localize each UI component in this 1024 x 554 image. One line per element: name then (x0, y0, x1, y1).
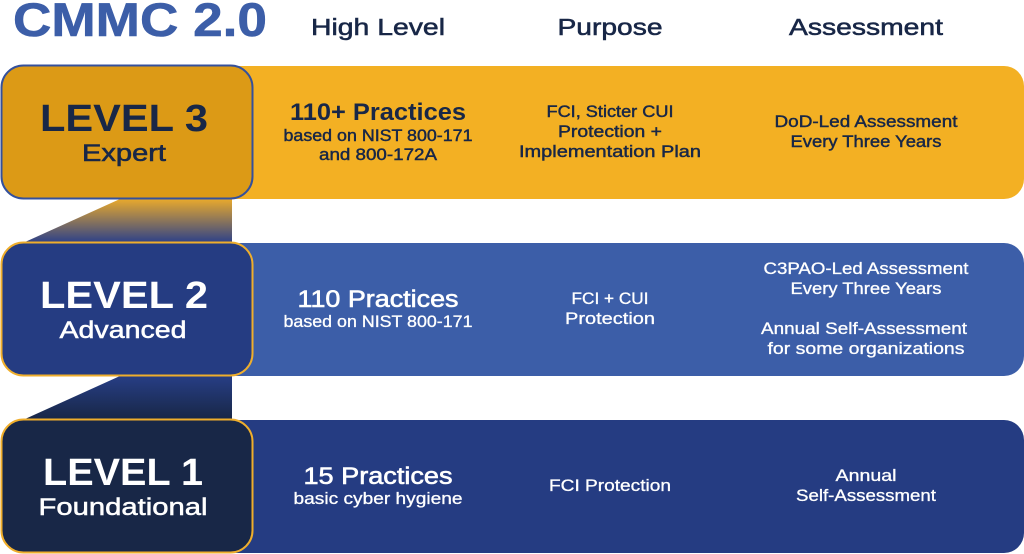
high level text: 110+ Practices (290, 99, 466, 126)
row bar (100, 420, 1024, 553)
high level text (294, 463, 462, 508)
assessment text (774, 113, 958, 151)
connector: level 3 to level 2 (25, 199, 232, 242)
level badge: LEVEL 2 (40, 275, 208, 317)
panel: level 3 row (2, 66, 1024, 199)
purpose text (565, 290, 655, 328)
purpose text: FCI + CUI (572, 290, 648, 308)
connector: level 2 to level 1 (25, 376, 232, 419)
high level text: and 800-172A (319, 146, 437, 164)
assessment text: C3PAO-Led Assessment (764, 260, 969, 278)
assessment text (796, 467, 936, 505)
purpose text: Protection + (558, 123, 662, 141)
level badge: Foundational (38, 494, 208, 521)
assessment text: Self-Assessment (796, 487, 936, 505)
level badge: Expert (82, 140, 166, 167)
purpose text: Implementation Plan (519, 143, 701, 161)
assessment text: Annual Self-Assessment (761, 320, 967, 338)
level badge (2, 420, 252, 552)
high level text (284, 286, 472, 331)
assessment text: Every Three Years (790, 280, 942, 298)
level badge: Advanced (60, 317, 186, 344)
level badge (2, 66, 252, 198)
assessment text: DoD-Led Assessment (774, 113, 958, 131)
purpose text (519, 103, 701, 161)
high level text: based on NIST 800-171 (284, 127, 472, 145)
heading: High Level: High Level (311, 14, 445, 40)
high level text: 110 Practices (298, 286, 458, 313)
panel: level 2 row (2, 242, 1024, 376)
heading: Assessment: Assessment (789, 14, 944, 40)
purpose text: FCI Protection (549, 477, 671, 495)
purpose text: Protection (565, 310, 655, 328)
high level text: 15 Practices (304, 463, 452, 490)
high level text: basic cyber hygiene (294, 490, 462, 508)
column headings (311, 14, 944, 40)
level badge: LEVEL 3 (40, 98, 208, 140)
heading: Purpose: Purpose (558, 14, 662, 40)
level badge (2, 242, 252, 376)
panel: level 1 row (2, 420, 1024, 553)
row bar (100, 66, 1024, 199)
row bar (100, 243, 1024, 376)
assessment text: for some organizations (768, 340, 964, 358)
assessment text (761, 260, 969, 358)
high level text: based on NIST 800-171 (284, 313, 472, 331)
assessment text: Annual (836, 467, 896, 485)
assessment text: Every Three Years (790, 133, 942, 151)
high level text (284, 99, 472, 164)
purpose text: FCI, Sticter CUI (546, 103, 674, 121)
level badge: LEVEL 1 (43, 452, 203, 494)
